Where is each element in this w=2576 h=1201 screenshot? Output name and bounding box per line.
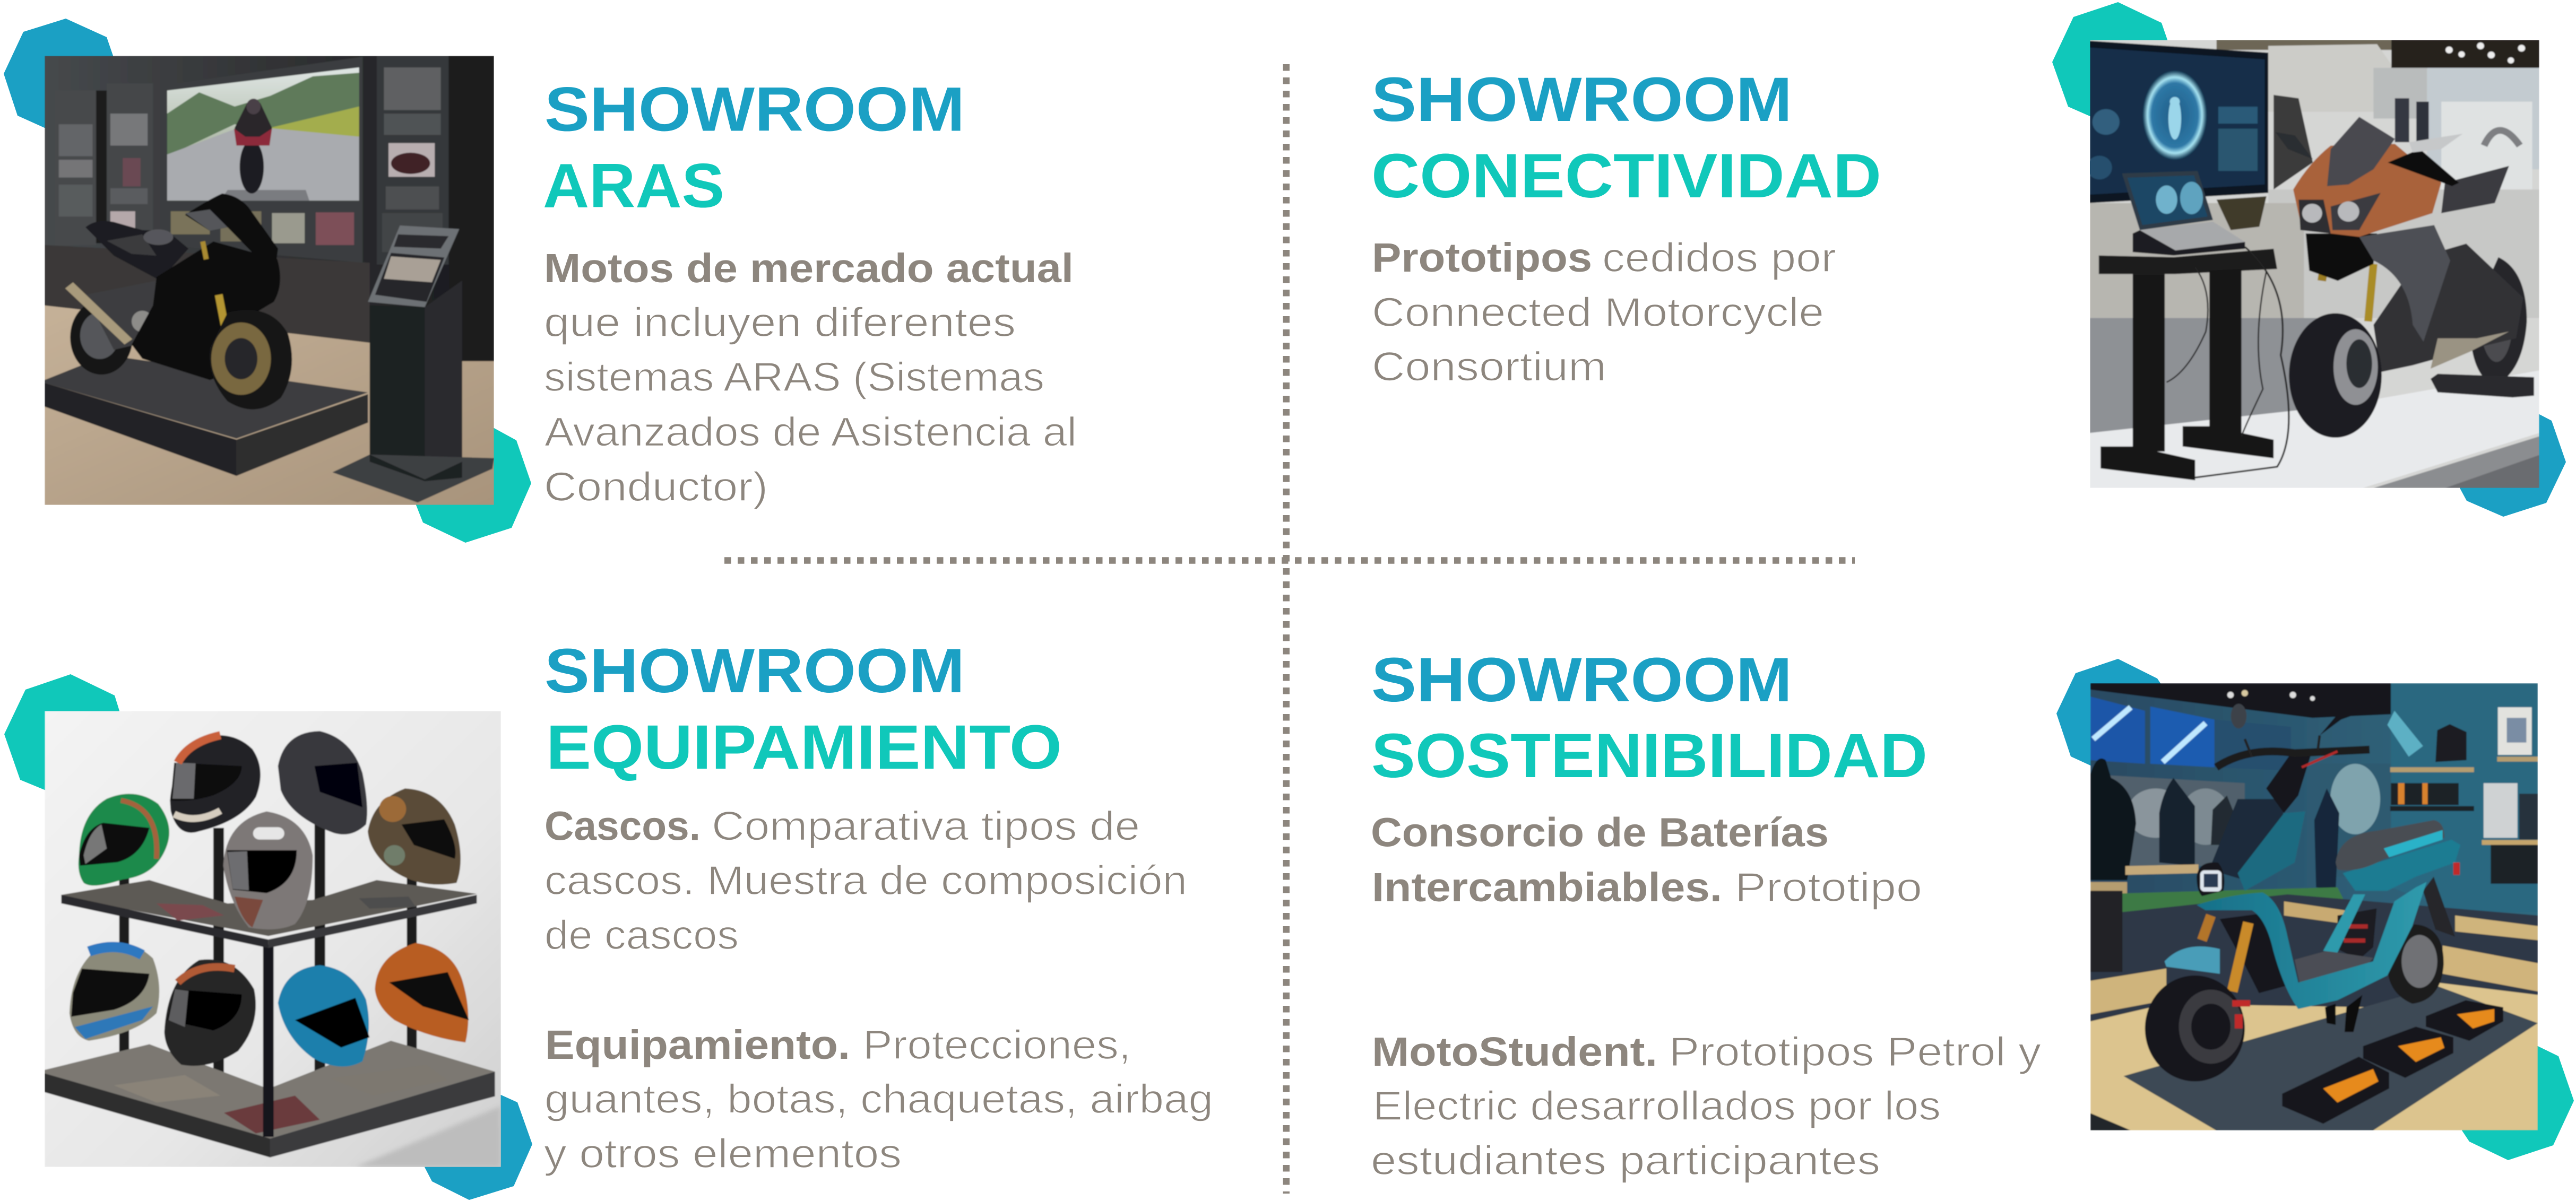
panel: showroom Conectividad [1371, 2, 2566, 517]
heading: Showroom Conectividad: SHOWROOM [1371, 65, 1792, 135]
text block: ARAS description: que incluyen diferentes [544, 300, 1016, 345]
heading: Showroom Sostenibilidad [1371, 645, 1927, 791]
photo: black sport motorcycle on plinth [45, 56, 494, 505]
heading: Showroom ARAS [543, 74, 965, 221]
text block: MotoStudent description [1371, 1029, 2042, 1183]
text block: ARAS description: Avanzados de Asistencia al [544, 410, 1077, 455]
text block: Cascos description: cascos. Muestra de composición [544, 858, 1187, 903]
decorative blob: blue top-left [4, 19, 138, 159]
heading: Showroom Sostenibilidad: SHOWROOM [1371, 645, 1792, 715]
text block: Equipamiento description: Protecciones, [863, 1022, 1131, 1068]
text block: Equipamiento description [544, 1022, 1213, 1177]
text block: Consorcio de Baterías description: Intercambiables. [1372, 865, 1722, 910]
heading: Showroom Conectividad: CONECTIVIDAD [1371, 141, 1881, 211]
text block: Consorcio de Baterías description: Consorcio de Baterías [1371, 810, 1829, 855]
decorative blob: teal bottom-right [2462, 1045, 2574, 1160]
heading: Showroom Equipamiento: SHOWROOM [544, 636, 965, 706]
text block: ARAS description: sistemas ARAS (Sistemas [544, 354, 1044, 400]
text block: Conectividad description: cedidos por [1602, 235, 1836, 281]
text block: Cascos description: Comparativa tipos de [712, 803, 1140, 849]
text block: Cascos description: de cascos [544, 912, 739, 958]
decorative blob: teal top-left [4, 674, 127, 817]
text block: Consorcio de Baterías description [1371, 810, 1922, 910]
heading: Showroom Equipamiento: EQUIPAMIENTO [546, 712, 1062, 782]
text block: Cascos description: Cascos. [544, 803, 701, 849]
text block: MotoStudent description: Electric desarrollados por los [1373, 1083, 1941, 1129]
text block: Equipamiento description: Equipamiento. [545, 1022, 850, 1068]
text block: MotoStudent description: Prototipos Petrol y [1669, 1029, 2042, 1075]
photo: helmets on two-tier display stand [45, 711, 501, 1167]
photo: connected motorcycle prototype with monitor and laptop [2090, 40, 2539, 488]
decorative blob: blue top-left [2056, 659, 2171, 785]
heading: Showroom Equipamiento [544, 636, 1062, 782]
decorative blob: blue bottom-right [425, 1087, 532, 1200]
text block: Cascos description [544, 803, 1187, 958]
decorative blob: teal top-left [2052, 2, 2176, 138]
text block: Equipamiento description: guantes, botas, chaquetas, airbag [544, 1076, 1213, 1122]
photo: electric scooter with swappable batteries [2090, 683, 2538, 1130]
panel: showroom Sostenibilidad [1371, 645, 2574, 1183]
text block: Equipamiento description: y otros elementos [544, 1131, 902, 1177]
decorative blob: teal bottom-right [416, 424, 531, 543]
text block: Conectividad description: Consortium [1372, 344, 1606, 389]
text block: Conectividad description [1372, 235, 1836, 389]
text block: MotoStudent description: MotoStudent. [1372, 1029, 1657, 1075]
panel: showroom Equipamiento [4, 636, 1213, 1200]
heading: Showroom Sostenibilidad: SOSTENIBILIDAD [1371, 721, 1927, 791]
text block: Consorcio de Baterías description: Prototipo [1735, 865, 1922, 910]
panel: showroom ARAS [4, 19, 1077, 543]
heading: Showroom Conectividad [1371, 65, 1881, 211]
decorative blob: blue bottom-right [2460, 414, 2566, 517]
text block: ARAS description [544, 246, 1077, 510]
heading: Showroom ARAS: SHOWROOM [544, 74, 965, 144]
text block: ARAS description: Conductor) [544, 464, 768, 510]
text block: MotoStudent description: estudiantes participantes [1371, 1138, 1880, 1183]
text block: ARAS description: Motos de mercado actual [544, 246, 1074, 291]
text block: Conectividad description: Prototipos [1372, 235, 1592, 281]
heading: Showroom ARAS: ARAS [543, 151, 724, 221]
text block: Conectividad description: Connected Motorcycle [1372, 290, 1824, 335]
